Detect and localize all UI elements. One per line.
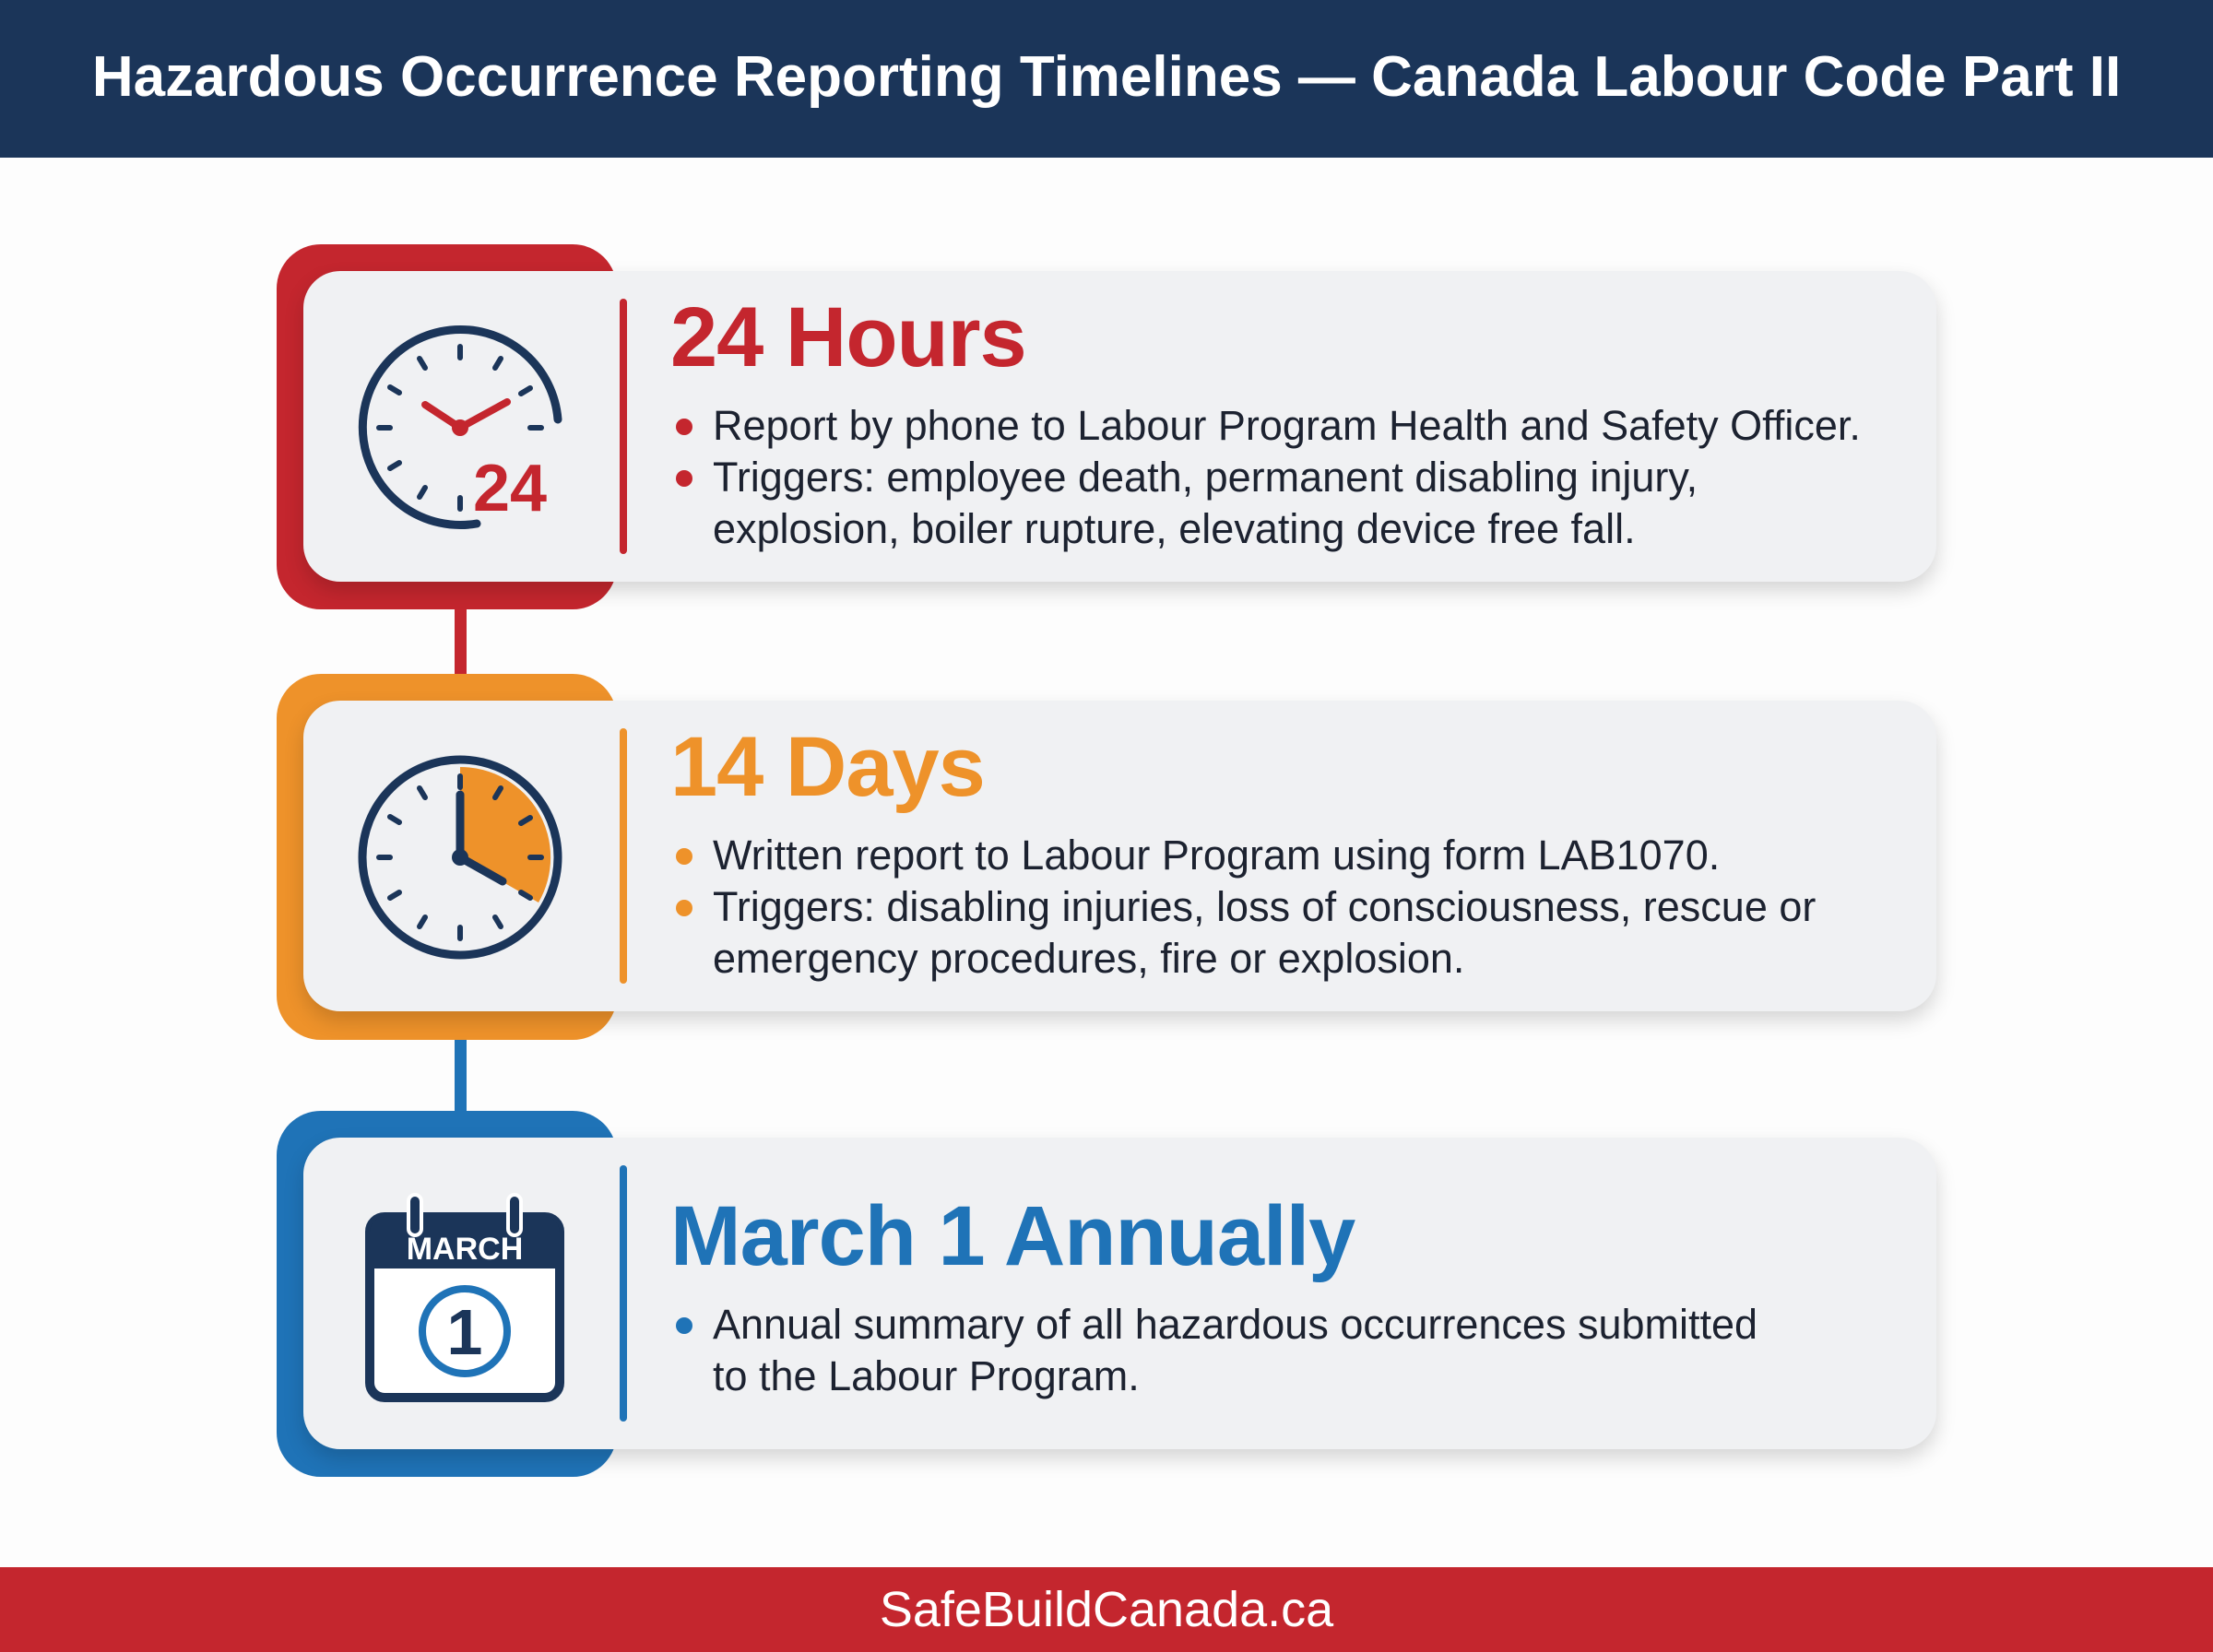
text block: emergency procedures, fire or explosion. bbox=[713, 935, 1464, 982]
header bbox=[0, 0, 2213, 158]
header: Hazardous Occurrence Reporting Timelines — Canada Labour Code Part II bbox=[92, 45, 2121, 109]
text block: explosion, boiler rupture, elevating device free fall. bbox=[713, 505, 1636, 552]
icon: calendar: MARCH bbox=[407, 1232, 523, 1267]
heading: 24 Hours bbox=[670, 290, 1026, 384]
heading: 14 Days bbox=[670, 720, 985, 814]
icon: clock 24 bbox=[358, 325, 562, 529]
text block: Report by phone to Labour Program Health and Safety Officer. bbox=[713, 402, 1861, 449]
text block: Triggers: disabling injuries, loss of consciousness, rescue or bbox=[713, 883, 1816, 930]
text block bbox=[676, 1301, 1757, 1399]
icon: clock 24: 24 bbox=[473, 452, 547, 525]
text block: to the Labour Program. bbox=[713, 1352, 1140, 1399]
connector: red bbox=[455, 604, 467, 678]
heading: March 1 Annually bbox=[670, 1189, 1355, 1283]
icon: calendar bbox=[365, 1193, 564, 1402]
panel: march 1 bbox=[277, 1111, 1944, 1477]
connector: blue bbox=[455, 1037, 467, 1115]
panel: 24 hours bbox=[277, 244, 1944, 609]
icon: clock 14 days bbox=[358, 756, 562, 959]
text block: Written report to Labour Program using form LAB1070. bbox=[713, 832, 1720, 879]
text block bbox=[676, 402, 1861, 552]
footer: SafeBuildCanada.ca bbox=[880, 1582, 1333, 1637]
footer bbox=[0, 1567, 2213, 1652]
icon: calendar: 1 bbox=[447, 1296, 482, 1368]
text block bbox=[676, 832, 1816, 982]
text block: Triggers: employee death, permanent disabling injury, bbox=[713, 454, 1698, 501]
text block: Annual summary of all hazardous occurrences submitted bbox=[713, 1301, 1757, 1348]
panel: 14 days bbox=[277, 674, 1944, 1040]
